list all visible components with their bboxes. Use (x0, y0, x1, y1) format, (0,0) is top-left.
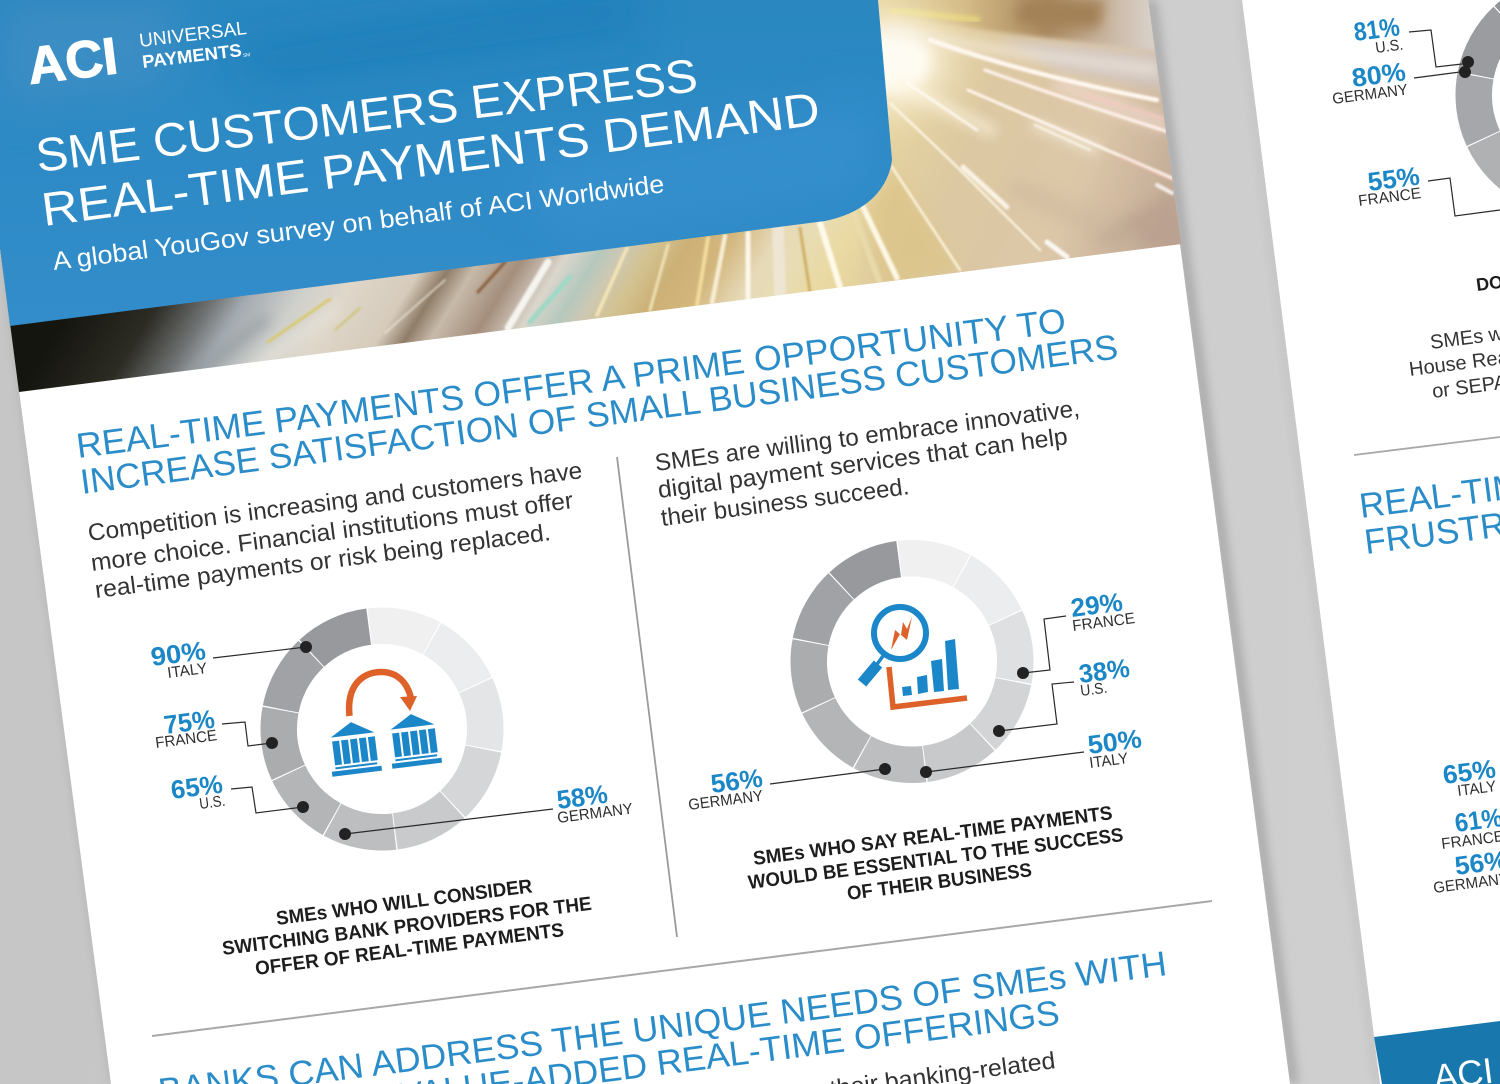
label: 38% U.S.: 38% (1077, 653, 1131, 689)
title: SME CUSTOMERS EXPRESS (33, 48, 700, 182)
label: 29% France: FRANCE (1071, 610, 1136, 635)
icon: magnifier over growth chart (862, 607, 967, 707)
heading: right page section (1360, 476, 1500, 554)
label: 65% U.S.: U.S. (198, 793, 226, 813)
label: 58% Germany (555, 779, 634, 827)
label: 56% Germany (687, 763, 764, 814)
heading: section one: INCREASE SATISFACTION OF SMALL BUSINESS CUSTOMERS (78, 328, 1120, 502)
label: 65% Italy: 65% (1441, 753, 1497, 790)
label: 75% France: 75% (162, 704, 216, 740)
text block: left intro: more choice. Financial institutions must offer (89, 487, 575, 577)
footer band: right page (1374, 1021, 1500, 1084)
text block: right page partial copy (1410, 330, 1500, 398)
panel: right page (1242, 0, 1500, 1084)
caption: switching bank providers: OFFER OF REAL-TIME PAYMENTS (254, 919, 565, 980)
logo: ACI Universal Payments: PAYMENTS (141, 40, 243, 72)
logo: ACI Universal Payments: UNIVERSAL (138, 18, 248, 52)
label: 61% France (1442, 808, 1500, 849)
label: 81% U.S. (1354, 18, 1402, 52)
label: 65% Italy (1444, 760, 1496, 796)
chart: donut switching bank providers (213, 583, 553, 875)
label: 56% Germany: GERMANY (687, 788, 764, 814)
text block: left intro (86, 457, 584, 604)
label: 90% Italy: ITALY (166, 660, 208, 682)
caption: switching bank providers (221, 875, 593, 980)
caption: essential to success (747, 802, 1125, 905)
text block: right intro: their business succeed. (659, 473, 911, 532)
label: 90% Italy: 90% (149, 635, 207, 672)
label: 38% U.S.: U.S. (1079, 680, 1108, 700)
logo: ACI Universal Payments: SM (243, 52, 251, 59)
caption: essential to success: WOULD BE ESSENTIAL TO THE SUCCESS (747, 824, 1125, 894)
subtitle: A global YouGov survey on behalf of ACI Worldwide (51, 170, 666, 276)
label: 56% Germany (1434, 851, 1500, 892)
label: 58% Germany: 58% (555, 779, 609, 815)
caption: switching bank providers: SMEs WHO WILL CONSIDER (275, 875, 534, 930)
label: 80% Germany: GERMANY (1331, 81, 1409, 108)
text block: right intro: digital payment services that can help (656, 423, 1069, 504)
label: 81% U.S.: U.S. (1374, 37, 1404, 57)
text block: right intro: SMEs are willing to embrace innovative, (653, 395, 1081, 477)
label: 80% Germany: 80% (1350, 56, 1407, 93)
label: 75% France: FRANCE (154, 727, 218, 752)
label: 80% Germany (1333, 62, 1407, 104)
caption: essential to success: SMEs WHO SAY REAL-TIME PAYMENTS (752, 802, 1114, 870)
caption: switching bank providers: SWITCHING BANK PROVIDERS FOR THE (221, 893, 593, 960)
label: 50% Italy: 50% (1086, 723, 1143, 760)
chart: partial donut on right page (1409, 0, 1500, 241)
label: 55% France: 55% (1366, 161, 1421, 197)
label: 58% Germany: GERMANY (556, 800, 634, 827)
logo: ACI Universal Payments: ACI (24, 27, 121, 96)
label: 65% U.S.: 65% (169, 769, 224, 805)
label: 29% France (1069, 587, 1136, 635)
label: 29% France: 29% (1069, 587, 1124, 623)
text block: left intro: real-time payments or risk being replaced. (93, 519, 552, 604)
text block: left intro: Competition is increasing and customers have (86, 457, 584, 547)
chart: donut essential to success (766, 516, 1084, 807)
title: REAL-TIME PAYMENTS DEMAND (38, 82, 823, 236)
logo: ACI Universal Payments (24, 18, 251, 96)
header photo: motion-blurred road (0, 0, 1200, 400)
label: 81% U.S.: 81% (1352, 11, 1401, 47)
heading: section one: REAL-TIME PAYMENTS OFFER A PRIME OPPORTUNITY TO (74, 301, 1068, 466)
caption: essential to success: OF THEIR BUSINESS (846, 859, 1033, 905)
label: 75% France (154, 704, 218, 752)
text block: right intro (653, 395, 1081, 532)
header blue banner (0, 0, 892, 326)
label: 55% France (1358, 167, 1421, 206)
label: 50% Italy: ITALY (1088, 750, 1129, 772)
icon: banks with switching arrow (326, 672, 442, 777)
label: 56% Germany: 56% (709, 763, 764, 799)
label: 65% Italy: ITALY (1456, 778, 1497, 800)
label: 55% France: FRANCE (1357, 185, 1422, 210)
